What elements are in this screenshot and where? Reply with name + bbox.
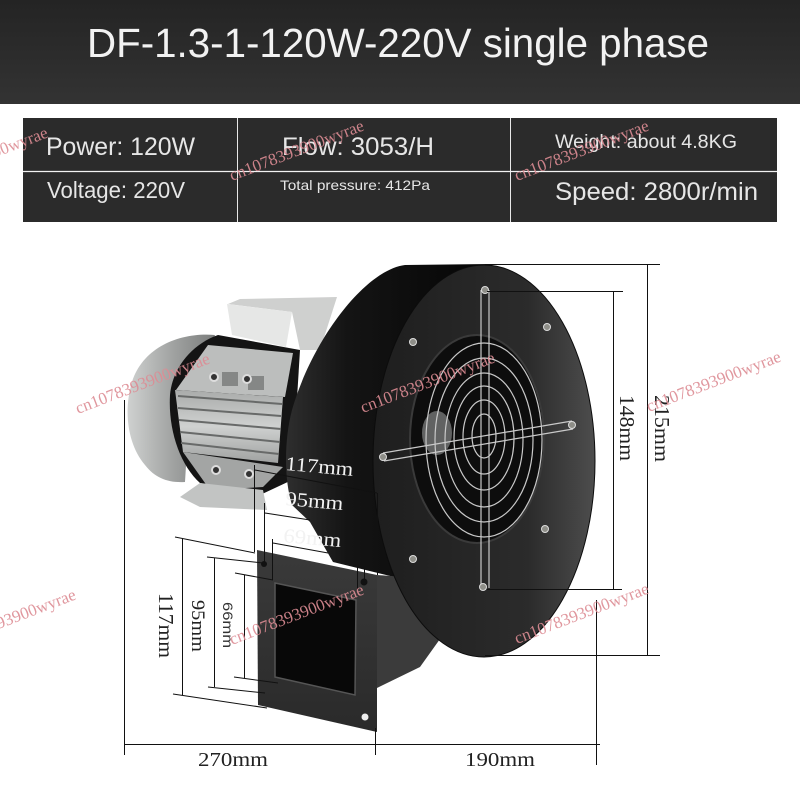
watermarks: cn1078393900wyrae <box>73 349 213 418</box>
watermarks: cn1078393900wyrae <box>358 348 498 417</box>
dimension: 270mm and 190mm widths <box>124 400 600 771</box>
dimension: 148mm bolt spacing <box>487 292 639 590</box>
dimension: 148mm bolt spacing: 148mm <box>615 395 639 461</box>
motor end cap <box>128 335 215 482</box>
spec: weight: Weight: about 4.8KG <box>555 132 737 153</box>
dimension: 95mm outlet height <box>187 557 265 693</box>
dimension: 215mm height <box>485 264 674 656</box>
specification table <box>23 118 777 222</box>
watermarks: cn1078393900wyrae <box>644 347 784 416</box>
dimension: 66mm outlet height: 66mm <box>220 602 236 648</box>
spec: flow: Flow: 3053/H <box>282 133 434 161</box>
motor hub <box>422 411 452 455</box>
watermarks <box>0 116 784 654</box>
spec: total pressure: Total pressure: 412Pa <box>280 177 430 193</box>
motor terminal box <box>227 297 337 350</box>
header band <box>0 0 800 104</box>
dimensions: outlet width lines and labels: 69mm <box>283 525 343 552</box>
motor finned housing <box>170 335 300 510</box>
dimension: 270mm and 190mm widths: 190mm <box>465 749 535 771</box>
outlet duct side <box>377 575 450 688</box>
spec: power: Power: 120W <box>46 133 195 161</box>
watermarks: cn1078393900wyrae <box>512 116 652 185</box>
dimension: 66mm outlet height <box>220 573 278 683</box>
housing bolts <box>380 286 576 590</box>
dimension: 95mm outlet height: 95mm <box>187 600 208 652</box>
dimensions: outlet width lines and labels: 117mm <box>285 453 355 481</box>
wire fan guard <box>383 290 573 588</box>
dimension: 117mm outlet height <box>154 537 267 708</box>
dimension: 117mm outlet height: 117mm <box>154 593 178 658</box>
dimension: 215mm height: 215mm <box>650 395 674 462</box>
fan inlet opening <box>410 335 544 543</box>
fan housing body <box>286 264 490 657</box>
title: DF-1.3-1-120W-220V single phase <box>87 20 709 66</box>
dimensions: outlet width lines and labels: 95mm <box>285 488 345 515</box>
spec: voltage: Voltage: 220V <box>47 177 186 203</box>
dimension: 270mm and 190mm widths: 270mm <box>198 749 268 771</box>
watermarks: cn1078393900wyrae <box>227 116 367 185</box>
spec: speed: Speed: 2800r/min <box>555 178 758 206</box>
fan front face <box>373 265 595 657</box>
dimensions: outlet width lines and labels <box>254 453 378 590</box>
blower product illustration <box>128 264 595 732</box>
watermarks: cn1078393900wyrae <box>512 579 652 648</box>
watermarks: cn1078393900wyrae <box>227 580 367 649</box>
outlet flange <box>257 550 377 732</box>
